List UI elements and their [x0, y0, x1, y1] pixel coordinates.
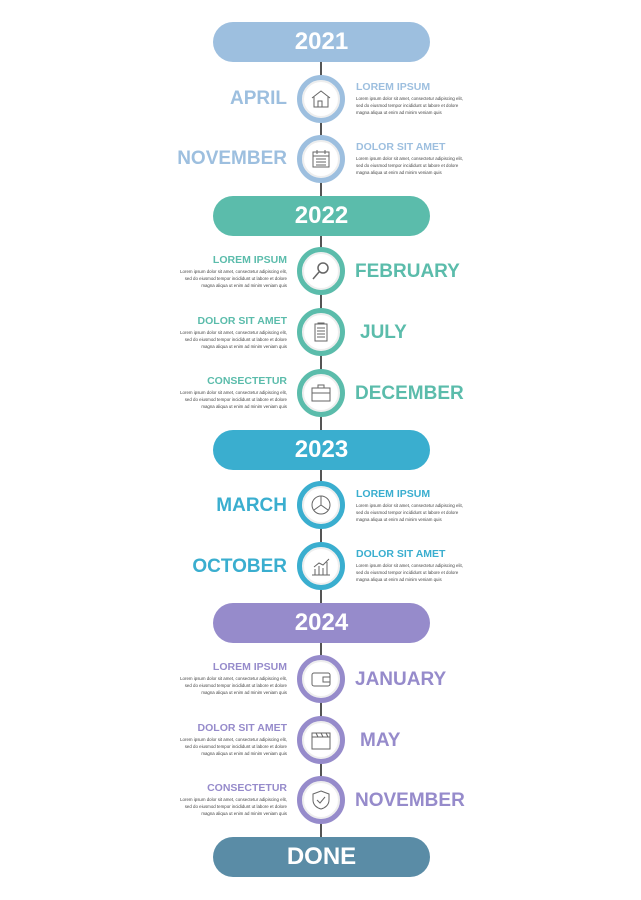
text: lorem ipsum 2023: Lorem ipsum dolor sit amet, consectetur adipiscing elit,	[356, 503, 463, 508]
pill: 2022	[213, 196, 430, 236]
text: dolor sit amet: sed do eiusmod tempor incididunt ut labore et dolore	[356, 163, 458, 168]
text: lorem ipsum 2022: sed do eiusmod tempor incididunt ut labore et dolore	[185, 276, 287, 281]
text: dolor sit amet 2024: sed do eiusmod tempor incididunt ut labore et dolore	[185, 744, 287, 749]
text: dolor sit amet	[356, 141, 463, 175]
text: lorem ipsum 2024: LOREM IPSUM	[213, 661, 287, 673]
month: January: JANUARY	[355, 669, 446, 690]
month: March: MARCH	[216, 495, 287, 516]
text: dolor sit amet 2023: magna aliqua ut enim ad minim veniam quis	[356, 577, 442, 582]
text: lorem ipsum 2022: Lorem ipsum dolor sit amet, consectetur adipiscing elit,	[180, 269, 287, 274]
timeline line	[320, 40, 322, 840]
month: April: APRIL	[230, 88, 287, 109]
text: lorem ipsum 2023: sed do eiusmod tempor incididunt ut labore et dolore	[356, 510, 458, 515]
text: dolor sit amet: DOLOR SIT AMET	[356, 141, 445, 153]
text: consectetur 2024: sed do eiusmod tempor incididunt ut labore et dolore	[185, 804, 287, 809]
text: dolor sit amet 2024: Lorem ipsum dolor sit amet, consectetur adipiscing elit,	[180, 737, 287, 742]
text: lorem ipsum: Lorem ipsum dolor sit amet, consectetur adipiscing elit,	[356, 96, 463, 101]
text: lorem ipsum: magna aliqua ut enim ad minim veniam quis	[356, 110, 442, 115]
month: July: JULY	[360, 322, 407, 343]
text: consectetur 2022: magna aliqua ut enim ad minim veniam quis	[201, 404, 287, 409]
month: November: NOVEMBER	[177, 148, 287, 169]
text: lorem ipsum 2023: LOREM IPSUM	[356, 488, 430, 500]
pill: 2023: 2023	[295, 436, 348, 463]
text: dolor sit amet: magna aliqua ut enim ad minim veniam quis	[356, 170, 442, 175]
icon: clapperboard	[297, 716, 345, 764]
month: October: OCTOBER	[192, 556, 287, 577]
text: dolor sit amet 2023: Lorem ipsum dolor sit amet, consectetur adipiscing elit,	[356, 563, 463, 568]
month: May: MAY	[360, 730, 400, 751]
text: lorem ipsum 2022	[180, 254, 287, 288]
text: lorem ipsum 2022: LOREM IPSUM	[213, 254, 287, 266]
text: dolor sit amet 2022: Lorem ipsum dolor sit amet, consectetur adipiscing elit,	[180, 330, 287, 335]
text: dolor sit amet 2022: DOLOR SIT AMET	[198, 315, 287, 327]
text: consectetur 2022: CONSECTETUR	[207, 375, 287, 387]
pill: 2023	[213, 430, 430, 470]
text: consectetur 2024	[180, 782, 287, 816]
text: dolor sit amet 2024: DOLOR SIT AMET	[198, 722, 287, 734]
text: consectetur 2022: Lorem ipsum dolor sit amet, consectetur adipiscing elit,	[180, 390, 287, 395]
icon: bar chart	[297, 542, 345, 590]
month: February: FEBRUARY	[355, 261, 460, 282]
icon: shield check	[297, 776, 345, 824]
text: dolor sit amet 2023	[356, 548, 463, 582]
icon: briefcase	[297, 369, 345, 417]
icon: house	[297, 75, 345, 123]
month: November 2024: NOVEMBER	[355, 790, 465, 811]
text: lorem ipsum 2022: magna aliqua ut enim ad minim veniam quis	[201, 283, 287, 288]
text: dolor sit amet: Lorem ipsum dolor sit amet, consectetur adipiscing elit,	[356, 156, 463, 161]
pill: done: DONE	[287, 843, 356, 870]
icon: calendar	[297, 135, 345, 183]
text: dolor sit amet 2023: sed do eiusmod tempor incididunt ut labore et dolore	[356, 570, 458, 575]
text: dolor sit amet 2023: DOLOR SIT AMET	[356, 548, 445, 560]
text: lorem ipsum 2024: Lorem ipsum dolor sit amet, consectetur adipiscing elit,	[180, 676, 287, 681]
text: dolor sit amet 2022	[180, 315, 287, 349]
text: lorem ipsum 2024	[180, 661, 287, 695]
text: lorem ipsum 2023	[356, 488, 463, 522]
text: dolor sit amet 2024	[180, 722, 287, 756]
text: lorem ipsum 2024: magna aliqua ut enim ad minim veniam quis	[201, 690, 287, 695]
text: consectetur 2024: Lorem ipsum dolor sit amet, consectetur adipiscing elit,	[180, 797, 287, 802]
pill: 2022: 2022	[295, 202, 348, 229]
pill: 2021	[213, 22, 430, 62]
icon: wallet	[297, 655, 345, 703]
icon: clipboard	[297, 308, 345, 356]
text: dolor sit amet 2022: magna aliqua ut enim ad minim veniam quis	[201, 344, 287, 349]
pill: 2024	[213, 603, 430, 643]
text: consectetur 2022	[180, 375, 287, 409]
pill: done	[213, 837, 430, 877]
text: consectetur 2024: CONSECTETUR	[207, 782, 287, 794]
pill: 2024: 2024	[295, 609, 348, 636]
icon: pie chart	[297, 481, 345, 529]
text: lorem ipsum 2023: magna aliqua ut enim ad minim veniam quis	[356, 517, 442, 522]
text: consectetur 2022: sed do eiusmod tempor incididunt ut labore et dolore	[185, 397, 287, 402]
pill: 2021: 2021	[295, 28, 348, 55]
text: lorem ipsum 2024: sed do eiusmod tempor incididunt ut labore et dolore	[185, 683, 287, 688]
text: consectetur 2024: magna aliqua ut enim ad minim veniam quis	[201, 811, 287, 816]
text: lorem ipsum: LOREM IPSUM	[356, 81, 430, 93]
month: December: DECEMBER	[355, 383, 464, 404]
text: lorem ipsum: sed do eiusmod tempor incididunt ut labore et dolore	[356, 103, 458, 108]
text: dolor sit amet 2022: sed do eiusmod tempor incididunt ut labore et dolore	[185, 337, 287, 342]
icon: magnifier	[297, 247, 345, 295]
text: lorem ipsum	[356, 81, 463, 115]
text: dolor sit amet 2024: magna aliqua ut enim ad minim veniam quis	[201, 751, 287, 756]
